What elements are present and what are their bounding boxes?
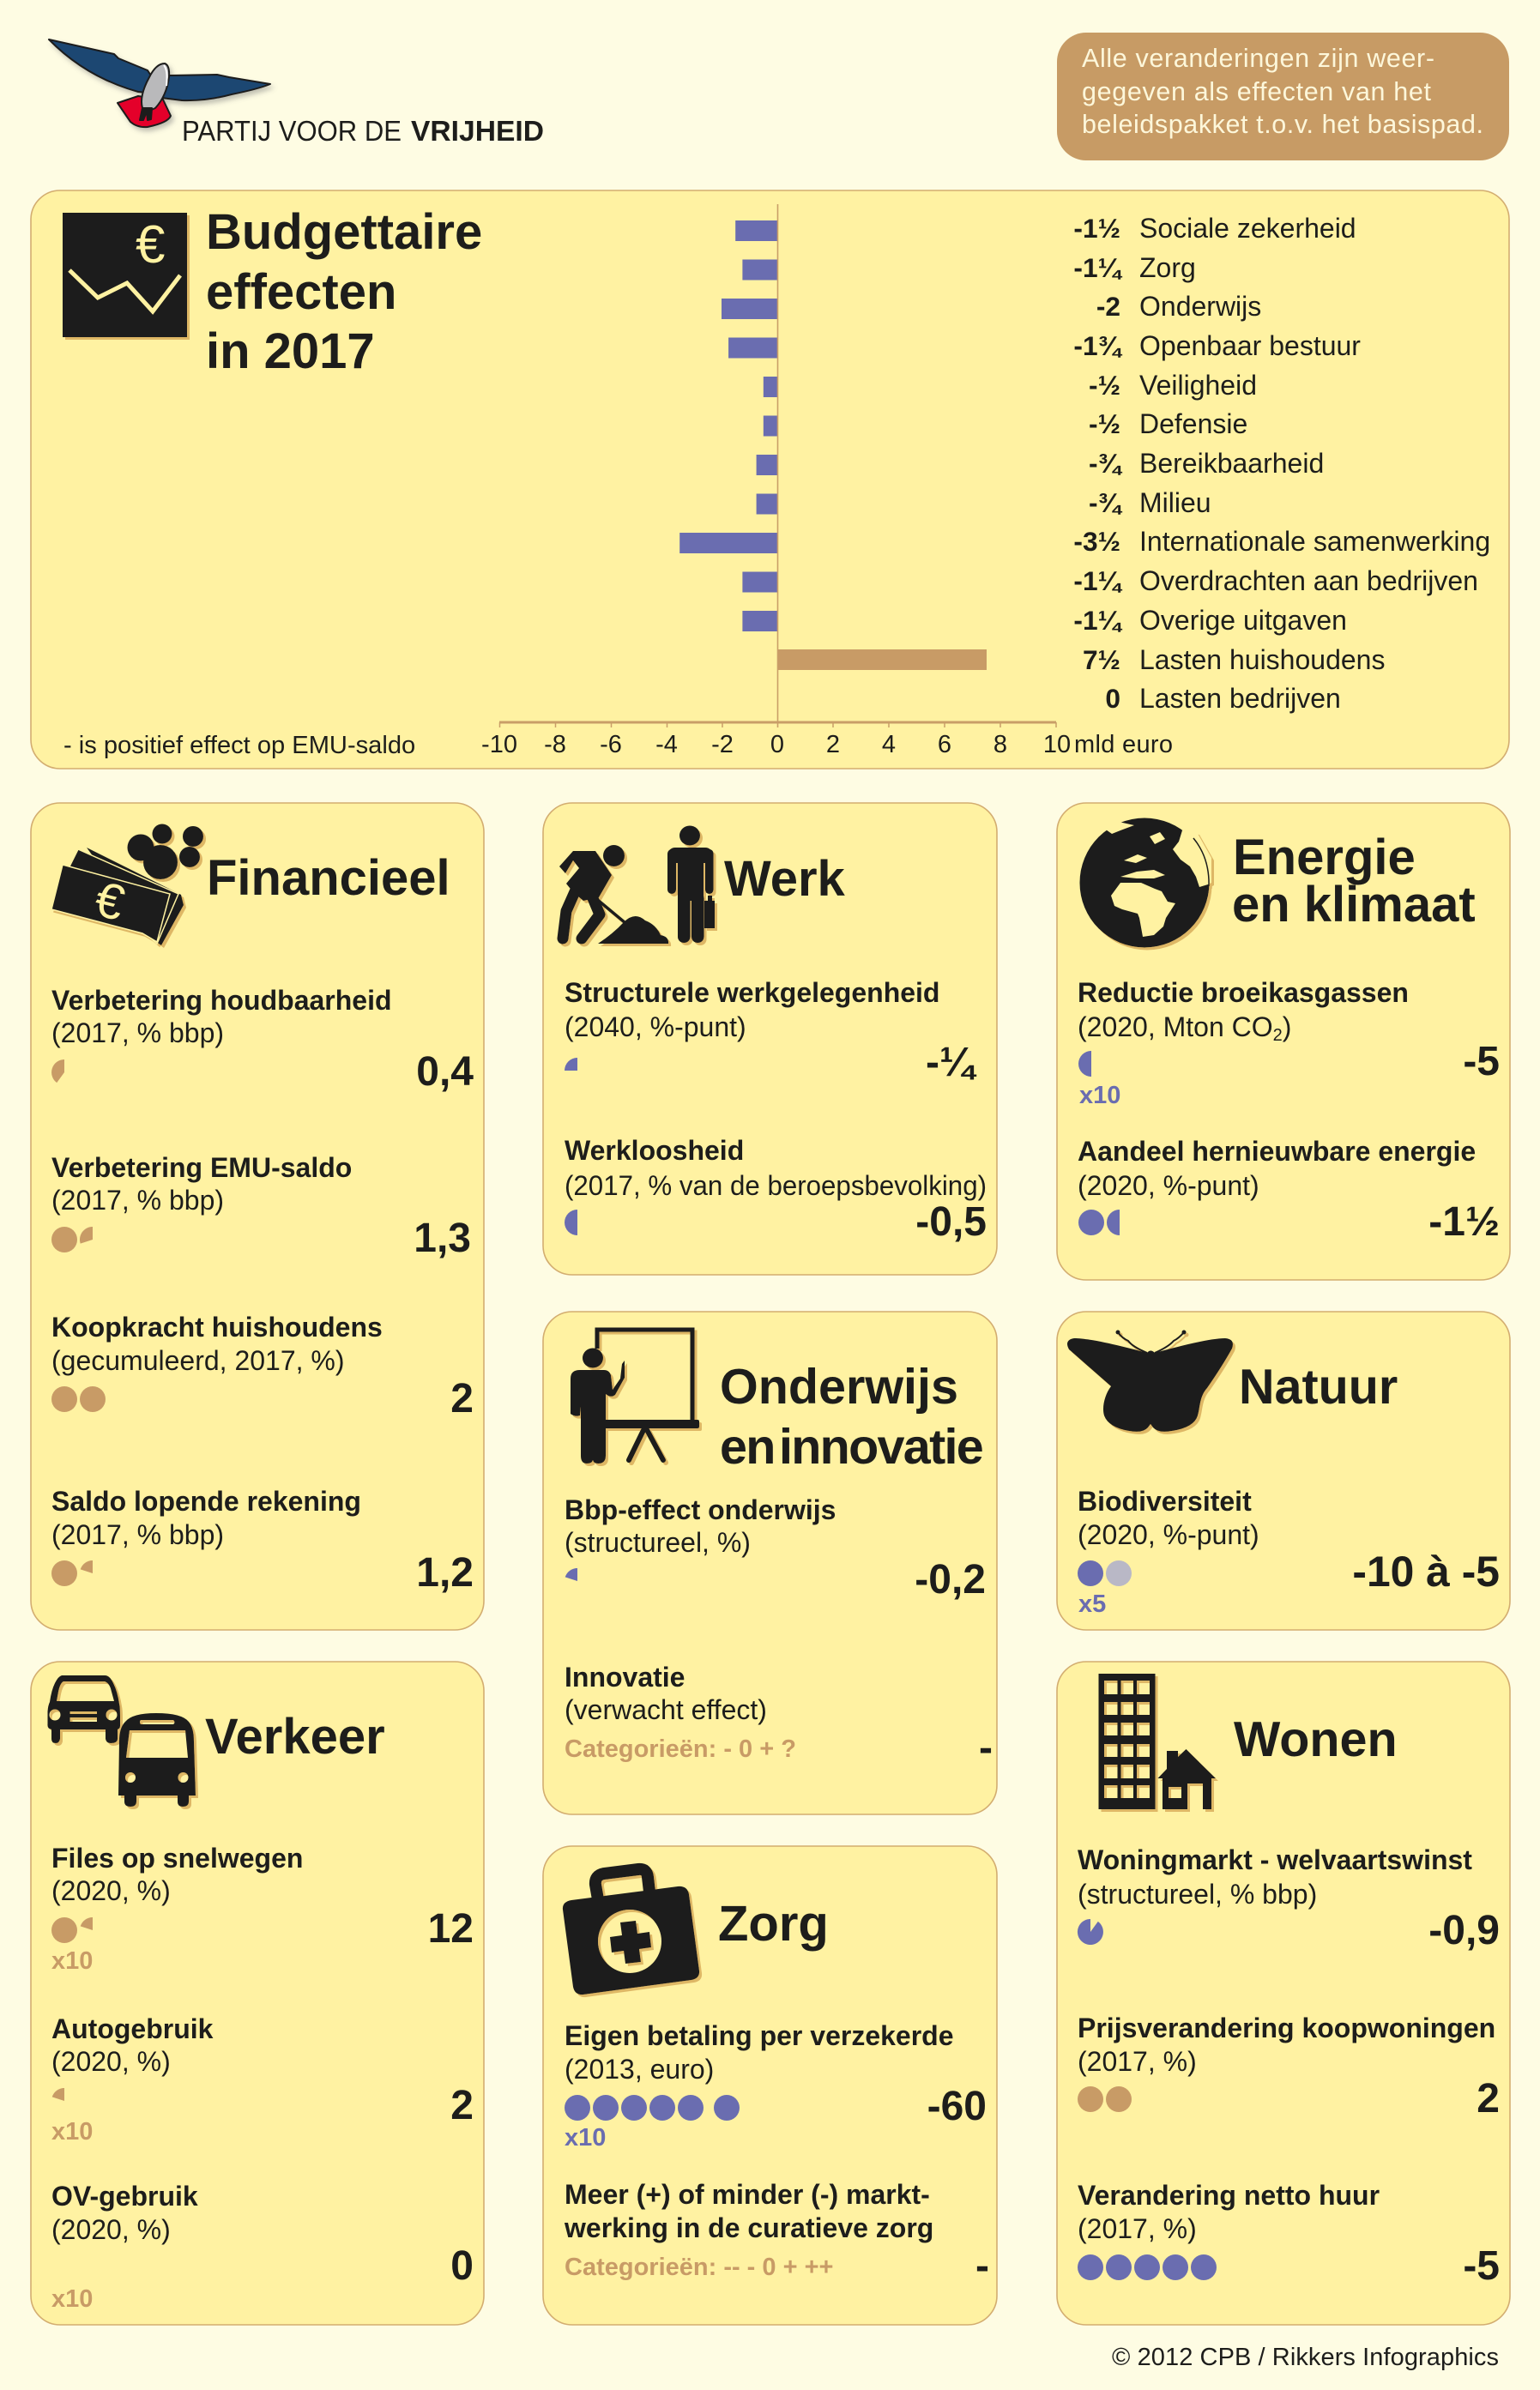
list of values and categories: -½ [1089,408,1120,439]
list of values and categories: Lasten huishoudens [1139,644,1385,675]
heading: Zorg [718,1896,829,1952]
indicator: Files op snelwegen [51,1843,474,1975]
callout: note about effects: Alle veranderingen zijn weer- [1082,44,1434,73]
indicator: Saldo lopende rekening: (2017, % bbp) [51,1519,224,1550]
indicator: Files op snelwegen: x10 [51,1947,93,1975]
heading: Energie [1233,830,1416,885]
icon: money: € [89,871,130,932]
heading [1232,830,1476,932]
indicator: Files op snelwegen: Files op snelwegen [51,1843,303,1874]
indicator: Verbetering EMU-saldo: 1,3 [414,1216,471,1261]
list of values and categories: Overdrachten aan bedrijven [1139,565,1478,596]
indicator: Eigen betaling per verzekerde: (2013, euro) [565,2054,714,2085]
icon: teacher at board [571,1330,699,1464]
indicator: Autogebruik: 2 [450,2083,474,2128]
icon: road worker and office worker [559,825,715,944]
list of values and categories: Defensie [1139,408,1247,439]
panel: Financieel [31,803,484,1630]
icon: money [51,824,203,945]
indicator: Werkloosheid: (2017, % van de beroepsbevolking) [565,1170,987,1201]
indicator: OV-gebruik: 0 [450,2243,474,2289]
list of values and categories [1073,213,1490,714]
list of values and categories: -2 [1096,291,1120,322]
indicator: Prijsverandering koopwoningen: Prijsverandering koopwoningen [1078,2013,1495,2043]
indicator: Innovatie: Innovatie [565,1662,685,1693]
heading [206,204,482,379]
indicator: Koopkracht huishoudens: (gecumuleerd, 2017, %) [51,1345,345,1376]
indicator: Structurele werkgelegenheid: Structurele werkgelegenheid [565,977,939,1008]
indicator: Files op snelwegen: 12 [428,1906,474,1952]
indicator: Aandeel hernieuwbare energie: Aandeel hernieuwbare energie [1078,1136,1476,1167]
indicator: Koopkracht huishoudens: 2 [450,1376,474,1421]
list of values and categories: -¾ [1089,487,1123,518]
heading: en innovatie [720,1420,983,1475]
list of values and categories: -1¾ [1073,330,1123,361]
list of values and categories: 7½ [1083,644,1120,675]
indicator: OV-gebruik: OV-gebruik [51,2181,198,2212]
panel: Onderwijs en innovatie [543,1312,997,1814]
indicator: Verbetering EMU-saldo: (2017, % bbp) [51,1185,224,1216]
axis labels [481,731,1173,758]
indicator: OV-gebruik [51,2181,474,2313]
panel: Natuur [1057,1312,1510,1630]
axis labels: -4 [655,731,678,758]
indicator: Saldo lopende rekening [51,1486,474,1596]
indicator: Woningmarkt welvaartswinst: (structureel, % bbp) [1078,1879,1317,1910]
indicator: Reductie broeikasgassen: Reductie broeikasgassen [1078,977,1409,1008]
indicator: Structurele werkgelegenheid: -¼ [926,1040,977,1085]
axis labels: -6 [600,731,622,758]
list of values and categories: -1½ [1073,213,1120,244]
indicator: Aandeel hernieuwbare energie [1078,1136,1500,1245]
logo wordmark: PARTIJ VOOR DE [182,115,402,147]
indicator: Meer of minder marktwerking: Meer (+) of minder (-) markt- [565,2179,930,2210]
panel: Verkeer [31,1662,484,2325]
list of values and categories: Sociale zekerheid [1139,213,1356,244]
heading: Werk [724,851,846,907]
icon: bird and shield [49,39,270,127]
axis labels: 8 [993,731,1007,758]
indicator: Autogebruik: Autogebruik [51,2013,214,2044]
list of values and categories: Openbaar bestuur [1139,330,1361,361]
list of values and categories: Zorg [1139,252,1196,283]
heading: en klimaat [1232,877,1476,932]
list of values and categories: -1¼ [1073,252,1123,283]
indicator: Aandeel hernieuwbare energie: (2020, %-punt) [1078,1170,1259,1201]
heading: in 2017 [206,323,375,379]
indicator: Bbp-effect onderwijs: (structureel, %) [565,1527,751,1558]
indicator: Bbp-effect onderwijs: Bbp-effect onderwijs [565,1494,836,1525]
indicator: Werkloosheid [565,1135,987,1245]
axis labels: 2 [826,731,840,758]
indicator: Verbetering houdbaarheid: Verbetering houdbaarheid [51,985,392,1016]
list of values and categories: Lasten bedrijven [1139,683,1341,714]
panel: Werk [543,803,997,1275]
icon: euro chart [63,213,187,337]
indicator: Verandering netto huur: Verandering netto huur [1078,2180,1380,2211]
indicator: Eigen betaling per verzekerde: Eigen betaling per verzekerde [565,2020,954,2051]
list of values and categories: -½ [1089,370,1120,401]
indicator: Prijsverandering koopwoningen: (2017, %) [1078,2046,1197,2077]
list of values and categories: -1¼ [1073,565,1123,596]
list of values and categories: Overige uitgaven [1139,605,1347,636]
heading: Budgettaire [206,204,482,260]
indicator: Eigen betaling per verzekerde: x10 [565,2124,606,2152]
indicator: Prijsverandering koopwoningen: 2 [1477,2076,1500,2121]
indicator: Verbetering houdbaarheid: 0,4 [416,1049,474,1095]
indicator: Biodiversiteit: (2020, %-punt) [1078,1519,1259,1550]
icon: globe [1079,818,1211,947]
indicator: Innovatie: (verwacht effect) [565,1694,767,1725]
indicator: Werkloosheid: -0,5 [915,1199,987,1245]
panel: Wonen [1057,1662,1510,2325]
indicator: Prijsverandering koopwoningen [1078,2013,1500,2121]
list of values and categories: Internationale samenwerking [1139,526,1490,557]
indicator: Autogebruik [51,2013,474,2146]
indicator: Files op snelwegen: (2020, %) [51,1875,171,1906]
indicator: Woningmarkt welvaartswinst [1078,1844,1500,1953]
icon: tower block [1098,1674,1155,1809]
icon: bus [118,1713,196,1807]
indicator: Verbetering houdbaarheid [51,985,474,1095]
indicator: Saldo lopende rekening: Saldo lopende rekening [51,1486,361,1517]
list of values and categories: Bereikbaarheid [1139,448,1324,479]
callout: note about effects [1057,33,1509,160]
icon: butterfly [1067,1330,1233,1432]
icon: car [47,1675,120,1743]
logo wordmark: VRIJHEID [411,115,544,147]
indicator: Verbetering houdbaarheid: (2017, % bbp) [51,1017,224,1048]
indicator: Meer of minder marktwerking: werking in de curatieve zorg [564,2212,933,2243]
indicator: Meer of minder marktwerking [564,2179,989,2289]
indicator: Koopkracht huishoudens [51,1312,474,1421]
list of values and categories: -1¼ [1073,605,1123,636]
axis labels: 6 [938,731,951,758]
bar chart [481,204,1173,758]
indicator: Verandering netto huur: -5 [1463,2243,1500,2289]
axis labels: 4 [882,731,896,758]
callout: note about effects: gegeven als effecten van het [1082,77,1432,106]
axis labels: -8 [544,731,566,758]
indicator: Structurele werkgelegenheid: (2040, %-punt) [565,1011,746,1042]
list of values and categories: -3½ [1073,526,1120,557]
panel: Energie en klimaat [1057,803,1510,1280]
indicator: Reductie broeikasgassen: (2020, Mton CO [1078,1011,1273,1042]
indicator: Meer of minder marktwerking: Categorieën: -- - 0 + ++ [565,2254,833,2281]
axis labels: -10 [481,731,517,758]
indicator: Reductie broeikasgassen: x10 [1079,1082,1120,1109]
icon: house [1158,1749,1216,1809]
callout: note about effects: beleidspakket t.o.v. het basispad. [1082,110,1483,139]
indicator: Biodiversiteit: Biodiversiteit [1078,1486,1252,1517]
indicator: Aandeel hernieuwbare energie: -1½ [1428,1199,1500,1245]
indicator: Verandering netto huur: (2017, %) [1078,2213,1197,2244]
panel: Zorg [543,1846,997,2325]
logo wordmark [182,115,544,147]
indicator: Bbp-effect onderwijs [565,1494,986,1602]
axis labels: -2 [711,731,734,758]
indicator: Reductie broeikasgassen: -5 [1463,1039,1500,1084]
axis labels: mld euro [1074,731,1173,758]
list of values and categories: Veiligheid [1139,370,1257,401]
indicator: Biodiversiteit: x5 [1078,1590,1106,1618]
indicator: Verbetering EMU-saldo [51,1152,471,1261]
indicator: OV-gebruik: (2020, %) [51,2214,171,2245]
indicator: OV-gebruik: x10 [51,2285,93,2313]
indicator: Innovatie [565,1662,993,1771]
heading: effecten [206,264,396,320]
heading [720,1360,983,1475]
indicator: Autogebruik: (2020, %) [51,2046,171,2077]
heading: Onderwijs [720,1360,958,1415]
indicator: Meer of minder marktwerking: - [975,2243,989,2289]
footnote: - is positief effect op EMU-saldo [63,732,415,759]
indicator: Verbetering EMU-saldo: Verbetering EMU-saldo [51,1152,352,1183]
indicator: Saldo lopende rekening: 1,2 [416,1550,474,1596]
icon: euro chart: € [136,215,165,275]
logo: Partij voor de Vrijheid [49,39,544,147]
axis labels: 0 [770,731,784,758]
indicator: Woningmarkt welvaartswinst: -0,9 [1428,1908,1500,1953]
indicator: Woningmarkt welvaartswinst: Woningmarkt - welvaartswinst [1078,1844,1472,1875]
list of values and categories: Onderwijs [1139,291,1261,322]
indicator: Koopkracht huishoudens: Koopkracht huishoudens [51,1312,383,1343]
list of values and categories: 0 [1105,683,1120,714]
indicator: Innovatie: - [979,1725,993,1771]
heading: Verkeer [205,1709,385,1765]
indicator: Reductie broeikasgassen: 2 [1273,1026,1283,1045]
indicator: Autogebruik: x10 [51,2118,93,2146]
list of values and categories: -¾ [1089,448,1123,479]
panel: budgettaire effecten [31,190,1509,769]
indicator: Biodiversiteit: -10 à -5 [1352,1548,1500,1596]
axis labels: 10 [1043,731,1071,758]
heading: Financieel [207,850,450,906]
indicator: Bbp-effect onderwijs: -0,2 [915,1557,986,1602]
indicator: Werkloosheid: Werkloosheid [565,1135,744,1166]
list of values and categories: Milieu [1139,487,1211,518]
indicator: Reductie broeikasgassen: ) [1283,1011,1291,1042]
credit line: © 2012 CPB / Rikkers Infographics [1112,2344,1499,2371]
heading: Natuur [1239,1360,1398,1415]
indicator: Verandering netto huur [1078,2180,1500,2289]
heading: Wonen [1234,1712,1398,1767]
indicator: Innovatie: Categorieën: - 0 + ? [565,1735,796,1763]
indicator: Structurele werkgelegenheid [565,977,977,1085]
indicator: Eigen betaling per verzekerde [565,2020,987,2152]
indicator: Reductie broeikasgassen [1078,977,1500,1109]
indicator: Biodiversiteit [1078,1486,1500,1618]
icon: first aid kit [563,1869,699,1995]
indicator: Eigen betaling per verzekerde: -60 [927,2084,987,2129]
